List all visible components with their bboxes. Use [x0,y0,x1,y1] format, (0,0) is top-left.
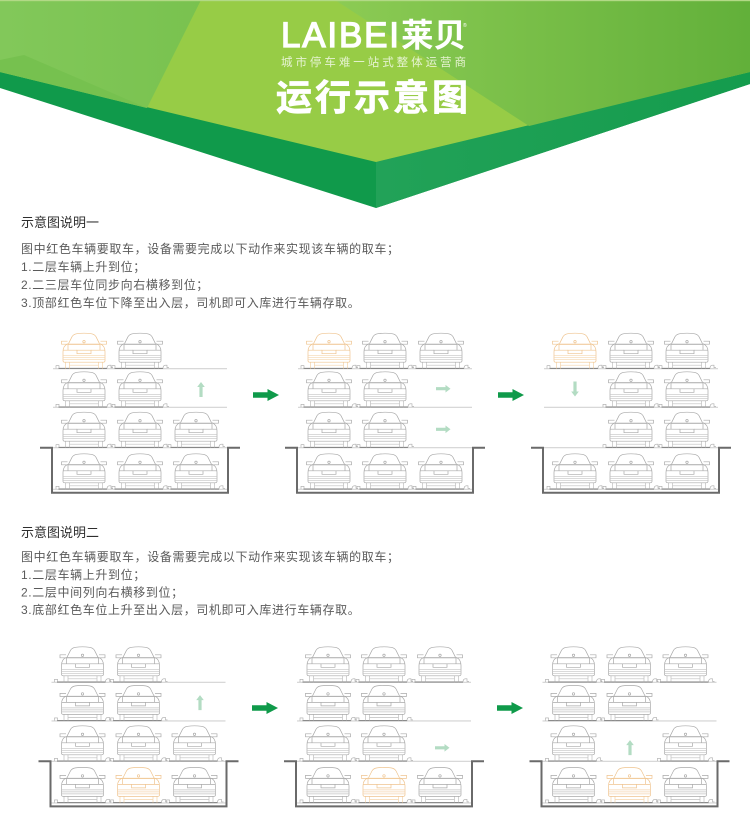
section one description: 3.顶部红色车位下降至出入层，司机即可入库进行车辆存取。 [21,295,360,310]
third row [546,726,714,761]
icon: up arrow [626,740,634,755]
logo: LAIBEI [281,16,399,55]
logo: 莱贝 [401,10,466,56]
icon: up arrow [197,382,205,397]
arrow: to step 2 [253,389,279,401]
second row [54,685,168,721]
third row [603,412,716,448]
logo [281,10,467,56]
top row [300,647,469,682]
second row [603,372,716,407]
second row [301,372,414,407]
tagline: 城市停车难一站式整体运营商 [281,54,466,70]
third row [54,726,224,761]
arrow: to step 3 [498,389,524,401]
icon: down arrow [571,382,579,396]
logo: ® [463,22,467,29]
icon: right arrows [436,385,450,433]
icon: right arrow [435,744,450,752]
pit row [301,454,470,489]
section one step 1 diagram [40,333,240,493]
section one step 2 diagram [285,333,485,493]
pit row with red-target car [300,767,469,803]
top row with red-target car [301,333,470,369]
section two step 2 diagram [284,647,484,806]
third row [56,412,225,448]
arrow: to step 3 [497,702,523,714]
section two description [21,549,400,617]
section two step 1 diagram [38,647,238,806]
pit row [56,454,225,489]
section one step 3 diagram [531,333,731,493]
section two description: 图中红色车辆要取车，设备需要完成以下动作来实现该车辆的取车； [21,549,400,564]
section one description [21,241,400,310]
section one description: 图中红色车辆要取车，设备需要完成以下动作来实现该车辆的取车； [21,241,400,256]
top row with red-target car [56,333,169,369]
top row [54,647,168,682]
top row with red-target car [547,333,716,369]
section one heading: 示意图说明一 [21,215,99,230]
pit row [547,454,716,489]
title: 运行示意图 [276,69,468,121]
section two description: 2.二层中间列向右横移到位； [21,584,184,600]
section two description: 3.底部红色车位上升至出入层，司机即可入库进行车辆存取。 [21,602,360,617]
section two step 3 diagram [530,647,730,806]
section two description: 1.二层车辆上升到位； [21,567,146,582]
pit row with red-target car [54,767,224,803]
second row [56,372,169,407]
section one description: 2.二三层车位同步向右横移到位； [21,277,209,292]
section one description: 1.二层车辆上升到位； [21,259,146,274]
pit row with red-target car [546,767,714,803]
icon: up arrow [196,695,204,710]
second row [300,685,413,721]
third row [301,412,414,448]
section two heading: 示意图说明二 [21,525,99,540]
second row [546,685,658,721]
header banner [0,0,750,208]
arrow: to step 2 [252,702,278,714]
third row [300,726,413,761]
top row [546,647,714,682]
